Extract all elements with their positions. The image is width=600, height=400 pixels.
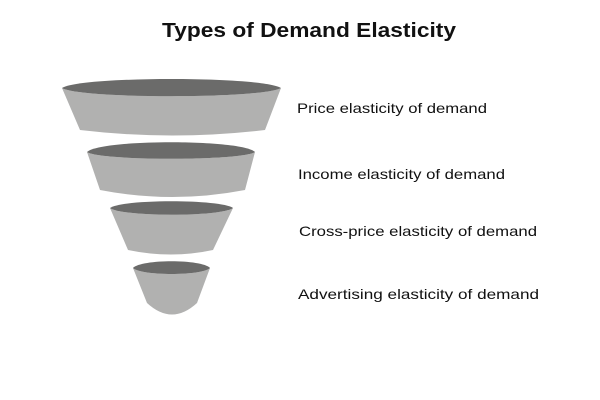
segment 4: advertising [133,261,210,314]
label: cross-price elasticity: Cross-price elasticity of demand [299,223,537,239]
funnel [62,79,281,314]
label: advertising elasticity: Advertising elasticity of demand [298,286,539,302]
title: Types of Demand Elasticity [162,20,457,42]
segment 3: cross-price [110,201,233,254]
segment 2: income [87,142,255,197]
segment 1: price [62,79,281,136]
label: income elasticity: Income elasticity of demand [298,166,505,182]
label: price elasticity: Price elasticity of demand [297,100,487,116]
